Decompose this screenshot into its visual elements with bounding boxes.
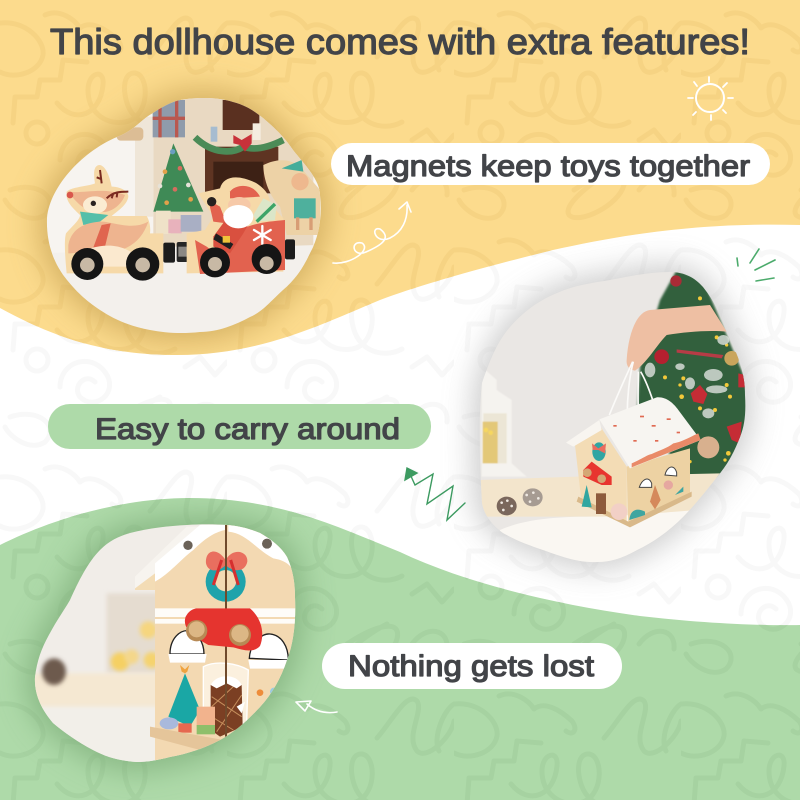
title: This dollhouse comes with extra features! xyxy=(50,21,750,62)
house front xyxy=(135,523,297,763)
photo: carrying the house by its handle xyxy=(480,272,746,562)
photo: magnet train toys xyxy=(46,98,321,333)
panel: yellow top band xyxy=(0,0,800,360)
panel: green bottom band xyxy=(0,490,800,800)
icon: sun xyxy=(688,77,733,120)
pill: easy to carry around xyxy=(48,404,431,449)
santa sleigh car xyxy=(187,177,285,277)
wall and christmas tree xyxy=(480,272,746,530)
red clasp xyxy=(185,608,262,650)
photo shadow: carry photo xyxy=(480,272,745,562)
house xyxy=(566,397,701,527)
pill: nothing gets lost: Nothing gets lost xyxy=(348,650,595,683)
table and snow xyxy=(480,473,720,570)
photo: house door with wreath and clasp xyxy=(34,524,296,762)
pill: easy to carry around: Easy to carry around xyxy=(95,413,400,446)
pine cones xyxy=(497,488,543,515)
lantern xyxy=(482,367,527,477)
wheels and magnets xyxy=(71,239,295,281)
icon: green sparkle ticks xyxy=(737,249,775,281)
room background xyxy=(46,98,321,333)
pill: magnets keep toys together: Magnets keep toys together xyxy=(346,150,750,183)
blurred room background xyxy=(34,524,296,762)
arrow: small white arrow to photo xyxy=(296,701,337,713)
pill: magnets keep toys together xyxy=(331,143,770,185)
arrow: curly white arrow xyxy=(333,202,411,263)
arrow: green zigzag arrow xyxy=(405,468,465,520)
reindeer car xyxy=(65,165,163,273)
hand and handle xyxy=(609,305,727,422)
pill: nothing gets lost xyxy=(322,643,622,689)
